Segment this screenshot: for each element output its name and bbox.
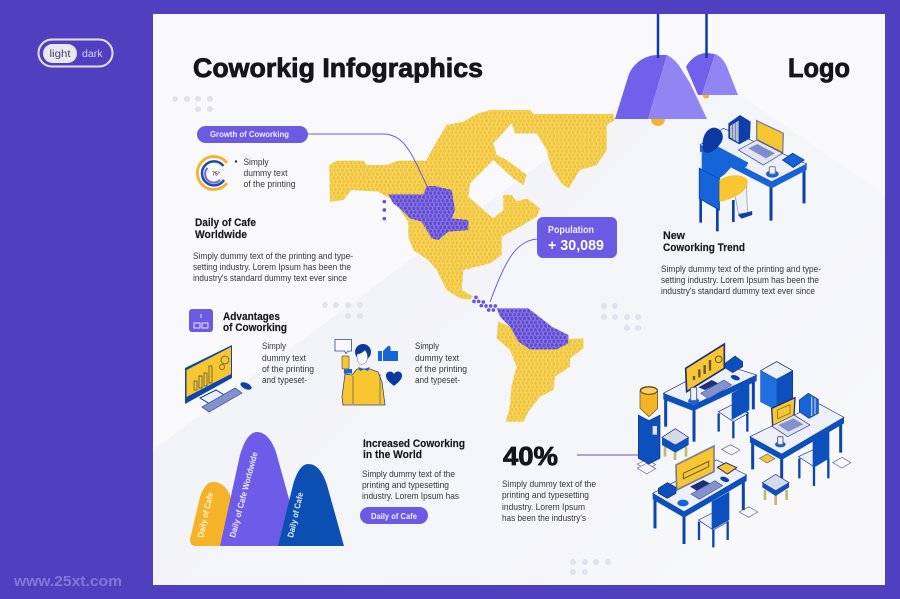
pill: growth of coworking: Growth of Coworking	[210, 129, 289, 139]
text block: 40 percent: printing and typesetting	[502, 490, 589, 500]
desk 3 box	[658, 483, 676, 498]
growth text	[235, 157, 296, 189]
watermark: www.25xt.com	[13, 574, 122, 590]
chair 2	[798, 432, 829, 486]
heading: daily of cafe worldwide	[195, 217, 256, 241]
person collar	[358, 367, 370, 371]
text block: 40 percent: has been the industry's	[502, 513, 586, 523]
callout: population: Population	[548, 225, 594, 236]
desk 2 books	[799, 393, 818, 418]
light dark toggle: light	[50, 48, 71, 60]
pill: daily of cafe: Daily of Cafe	[371, 511, 417, 521]
label: daily of cafe blue: Daily of Cafe	[285, 491, 305, 538]
desk 3 plate	[677, 500, 689, 506]
connector: 40 percent	[577, 454, 640, 456]
text block: social	[415, 341, 467, 385]
desk 3 top	[653, 460, 747, 512]
growth text: Simply	[244, 157, 269, 167]
desk legs	[771, 170, 804, 221]
monitor chart	[194, 356, 229, 390]
illustration: office	[637, 344, 851, 547]
heading: advantages of coworking	[223, 311, 287, 334]
white panel	[153, 14, 885, 585]
label: daily of cafe: Daily of Cafe	[195, 491, 215, 538]
illustration: social person	[335, 340, 402, 405]
map: highlighted region south dots	[497, 308, 568, 349]
text block: social: dummy text	[415, 353, 459, 363]
icon: advantages	[189, 309, 213, 332]
text block: increased coworking: industry. Lorem Ipsum has	[362, 491, 459, 501]
title: Coworkig Infographics	[193, 53, 483, 83]
heading: increased coworking: Increased Coworking	[363, 438, 465, 450]
heading: advantages of coworking: of Coworking	[223, 322, 287, 334]
text block: daily of cafe: setting industry. Lorem Ipsum has been the	[193, 262, 351, 272]
map: highlighted region north	[388, 186, 468, 240]
desk 3 edge	[653, 475, 747, 518]
server tower	[761, 362, 793, 410]
text block: social: of the printing	[415, 364, 467, 374]
text block: monitor: dummy text	[262, 353, 306, 363]
mountain: blue	[278, 464, 344, 546]
stool 1	[662, 429, 689, 460]
heading: new coworking trend: New	[663, 230, 685, 242]
desk top	[700, 128, 807, 182]
logo: Logo	[788, 53, 850, 83]
heading: daily of cafe worldwide: Daily of Cafe	[195, 217, 256, 229]
thumbs up	[378, 346, 398, 361]
desk 1 monitor	[686, 344, 724, 392]
illustration: desk and worker	[699, 115, 807, 231]
chair seat	[699, 168, 719, 210]
map: South America	[497, 322, 583, 422]
map: North America	[329, 110, 615, 299]
desk 2 laptop	[772, 398, 810, 437]
heading: increased coworking	[363, 438, 465, 461]
tablet	[783, 153, 804, 167]
light dark toggle	[38, 40, 112, 66]
monitor frame	[185, 345, 232, 404]
heading: new coworking trend: Coworking Trend	[663, 242, 745, 254]
text block: daily of cafe	[193, 251, 353, 283]
pill: growth of coworking	[197, 126, 308, 143]
floor papers	[637, 445, 851, 517]
text block: daily of cafe: industry's standard dummy text ever since	[193, 273, 347, 283]
desk 2 top	[750, 403, 844, 454]
text block: increased coworking: printing and typesetting	[362, 480, 449, 490]
map: South America dots	[497, 322, 583, 422]
worker legs	[735, 187, 747, 213]
phone	[342, 356, 349, 369]
callout: population: + 30,089	[548, 238, 604, 254]
desk 1 cup	[688, 387, 699, 404]
dots: bottom	[570, 559, 611, 575]
worker torso	[702, 145, 748, 178]
text block: increased coworking	[362, 469, 459, 501]
heading: new coworking trend	[663, 230, 745, 254]
monitor stand	[200, 390, 226, 404]
heading: advantages of coworking: Advantages	[223, 311, 280, 323]
stool 2	[762, 474, 789, 505]
map: highlighted region south	[497, 308, 568, 349]
label: daily of cafe worldwide: Daily of Cafe Worldwide	[227, 451, 260, 539]
map: isthmus dots	[382, 200, 497, 312]
desk 3 mouse	[719, 476, 730, 483]
desk 3 legs	[655, 480, 743, 544]
desk 2 cup	[775, 437, 786, 447]
heading: increased coworking: in the World	[363, 449, 422, 461]
text block: coworking trend: Simply dummy text of the printing and type-	[661, 264, 821, 274]
monitor screen	[186, 347, 231, 397]
lamp: small	[686, 14, 738, 98]
desk 3 keyboard	[691, 481, 723, 499]
worker shoe	[739, 212, 752, 218]
mountain chart	[190, 432, 344, 546]
connector: growth	[308, 134, 427, 186]
worker skirt	[719, 175, 748, 202]
text block: coworking trend: setting industry. Lorem Ipsum has been the	[661, 275, 819, 285]
desk 2 legs	[753, 423, 841, 487]
text block: coworking trend: industry's standard dummy text ever since	[661, 286, 815, 296]
mountain: purple	[220, 432, 302, 546]
text block: social: and typeset-	[415, 375, 460, 385]
person face	[357, 350, 368, 364]
dotted map of the Americas	[329, 110, 615, 422]
person arm line	[353, 374, 380, 404]
desk 3 tablet	[717, 463, 737, 474]
map: highlighted region north dots	[388, 186, 468, 240]
text block: monitor	[262, 341, 314, 385]
heading: daily of cafe worldwide: Worldwide	[195, 229, 247, 241]
text block: social: Simply	[415, 341, 439, 351]
desk 1 top	[663, 363, 757, 405]
chair 1	[718, 383, 749, 438]
person hair	[355, 344, 371, 360]
desk edge	[700, 145, 807, 188]
desk 1 legs	[666, 380, 753, 442]
text block: daily of cafe: Simply dummy text of the printing and type-	[193, 251, 353, 261]
callout: population	[537, 217, 617, 258]
text block: monitor: and typeset-	[262, 375, 307, 385]
icon: 75 degree rings	[197, 156, 227, 190]
laptop	[738, 121, 783, 165]
worker hair	[703, 128, 723, 153]
text block: 40 percent	[502, 479, 596, 523]
cup	[766, 167, 779, 178]
panel diagonal shade	[153, 90, 885, 585]
growth text: of the printing	[244, 179, 296, 189]
text block: 40 percent: Simply dummy text of the	[502, 479, 596, 489]
light dark toggle: dark	[82, 48, 103, 60]
icon: 75 degree rings: 75°	[212, 172, 220, 178]
desk 1 box	[725, 356, 743, 373]
pill: daily of cafe	[360, 507, 428, 524]
keyboard	[202, 388, 242, 412]
dots: mid left	[322, 302, 363, 319]
desk 1 keyboard	[701, 380, 732, 399]
text block: coworking trend	[661, 264, 821, 296]
mountain: yellow	[190, 482, 240, 546]
text block: monitor: Simply	[262, 341, 286, 351]
illustration: monitor	[185, 345, 253, 412]
speech bubble	[335, 340, 352, 354]
text block: 40 percent: industry. Lorem Ipsum	[502, 502, 585, 512]
chair 3	[698, 492, 729, 547]
heart	[386, 371, 402, 386]
dots: top left	[172, 96, 213, 112]
map: North America dots	[329, 110, 615, 299]
desk 1 edge	[663, 375, 757, 411]
desk 1 mouse	[730, 374, 741, 381]
mouse	[239, 381, 253, 391]
text block: increased coworking: Simply dummy text of the	[362, 469, 455, 479]
growth text: dummy text	[244, 168, 288, 178]
dots: mid right	[601, 303, 641, 331]
chair legs	[701, 197, 733, 231]
text block: monitor: of the printing	[262, 364, 314, 374]
desk 3 monitor	[676, 446, 714, 491]
stat: 40 percent: 40%	[503, 441, 558, 471]
books	[728, 115, 751, 144]
desk 2 edge	[750, 417, 844, 460]
water cooler	[638, 386, 660, 464]
connector: population	[490, 239, 537, 302]
lamp: large	[615, 14, 707, 126]
sleeve cuff	[344, 369, 352, 374]
person body	[342, 369, 385, 405]
